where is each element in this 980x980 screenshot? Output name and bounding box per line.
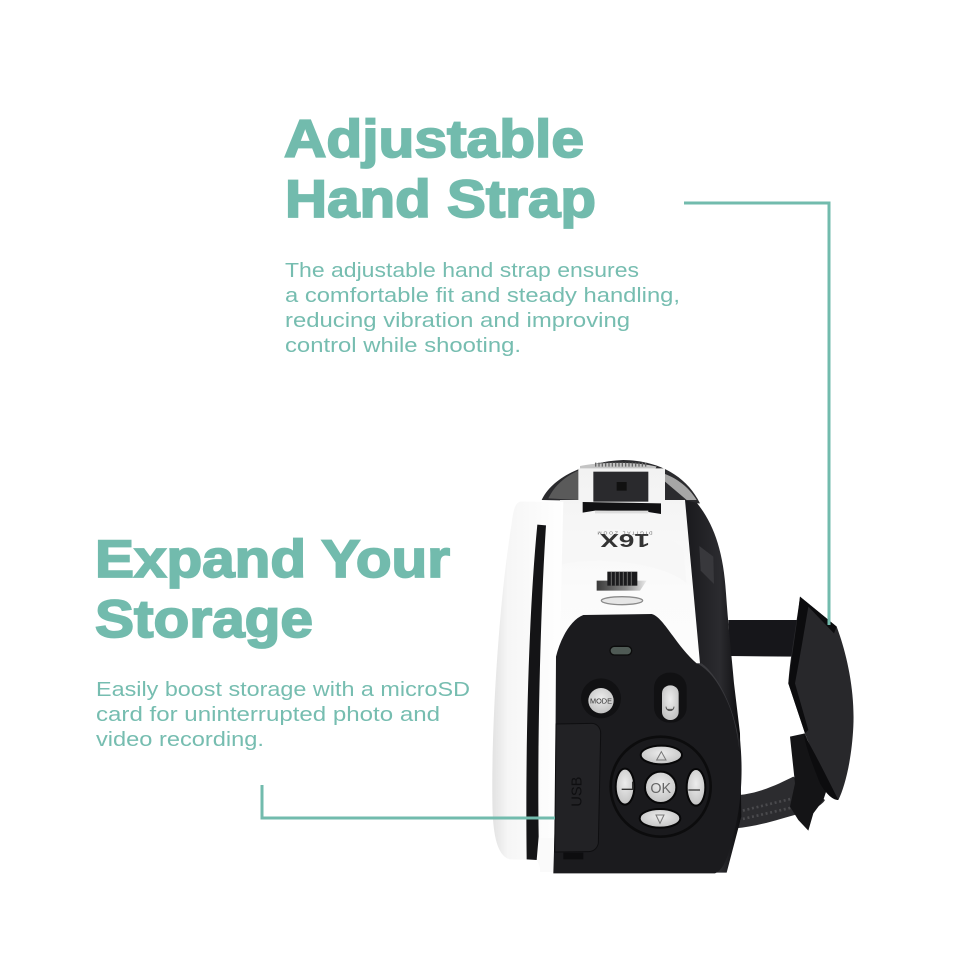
badge: 16X digital zoom — [597, 529, 652, 551]
black right body — [680, 500, 741, 873]
white top body — [540, 468, 700, 873]
front control panel: OK — [650, 781, 671, 797]
text block: hand strap description: control while shooting. — [285, 334, 521, 357]
heading: adjustable hand strap — [284, 110, 596, 229]
lens rings — [542, 460, 700, 503]
panel: adjustable hand strap text — [284, 110, 680, 357]
front control panel: USB — [570, 777, 586, 807]
zoom lever — [597, 572, 647, 605]
heading: expand your storage: Storage — [95, 590, 313, 649]
flash unit — [583, 472, 661, 514]
front control panel: MODE — [590, 696, 612, 705]
badge: 16X digital zoom: 16X — [599, 530, 650, 551]
text block: storage description: Easily boost storage with a microSD — [96, 678, 470, 701]
shutter button — [654, 673, 687, 723]
text block: storage description: card for uninterrupted photo and — [96, 703, 440, 726]
front control panel — [553, 614, 742, 873]
USB cover — [555, 723, 601, 852]
arrow: connector to storage slot — [262, 785, 555, 818]
text block: hand strap description: The adjustable hand strap ensures — [285, 259, 639, 282]
heading: adjustable hand strap: Adjustable — [284, 110, 584, 169]
text block: storage description: video recording. — [96, 728, 264, 751]
indicator light — [610, 646, 632, 655]
badge: 16X digital zoom: DIGITAL ZOOM — [597, 529, 652, 535]
directional pad — [611, 737, 711, 837]
text block: hand strap description — [285, 259, 680, 357]
LCD screen housing — [492, 502, 563, 872]
top body crease — [560, 529, 687, 583]
text block: hand strap description: a comfortable fit and steady handling, — [285, 284, 680, 307]
heading: expand your storage — [95, 530, 450, 649]
heading: expand your storage: Expand Your — [95, 530, 450, 589]
text block: hand strap description: reducing vibration and improving — [285, 309, 630, 332]
arrow: connector to hand strap — [684, 203, 829, 625]
side vent — [699, 546, 714, 584]
grip pad — [788, 597, 854, 800]
text block: storage description — [96, 678, 470, 751]
panel: expand your storage text — [95, 530, 470, 751]
mode button — [581, 678, 621, 718]
heading: adjustable hand strap: Hand Strap — [285, 170, 596, 229]
hand strap band — [728, 620, 827, 831]
grip pad fold — [788, 597, 838, 800]
illustration: camcorder side view — [492, 460, 854, 873]
